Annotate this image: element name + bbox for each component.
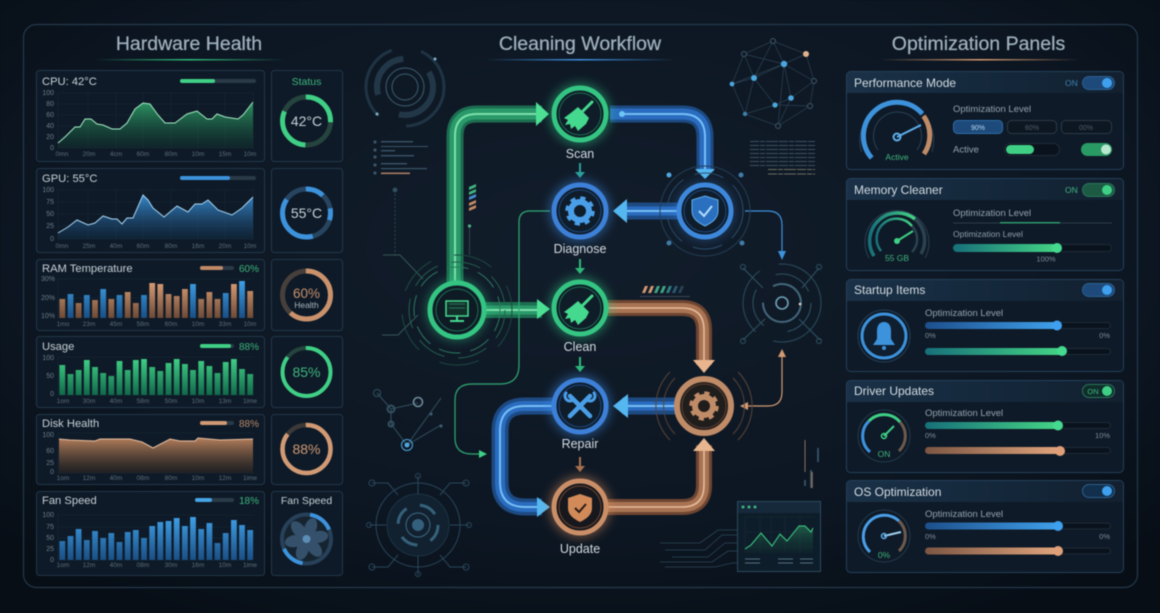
- slider: [925, 521, 1110, 531]
- chart card: usage: 0: [50, 391, 54, 398]
- panel: driver updates: Optimization Level: [925, 408, 1003, 419]
- pipe: repair to update: [500, 406, 556, 517]
- gauge: 0%: 0%: [878, 550, 891, 560]
- panel: performance mode: ON: [1065, 78, 1078, 88]
- decor: text lines: [750, 142, 815, 174]
- chart card: RAM temperature: 60%: [239, 264, 259, 275]
- decor: bottom left network: [374, 390, 442, 450]
- panel: startup items: Optimization Level: [925, 308, 1003, 319]
- ring card: disk: 88%: [292, 441, 321, 457]
- chart card: fan speed: 08m: [137, 562, 149, 569]
- chart card: usage: [36, 336, 264, 408]
- panel: driver updates: 10%: [1095, 431, 1110, 440]
- chart card: usage: 100: [42, 355, 54, 362]
- gauge: 55 GB: 55 GB: [885, 253, 909, 263]
- icon: shield: [568, 494, 592, 522]
- node: update: [549, 476, 611, 556]
- chart card: fan speed: 100: [42, 512, 54, 519]
- decor: orange stripes: [640, 286, 690, 297]
- panel: performance mode: Optimization Level: [953, 104, 1031, 115]
- icon: wrench and screwdriver: [565, 393, 595, 416]
- buttons: 60%: [1025, 125, 1039, 132]
- chart card: CPU: 20m: [83, 151, 95, 158]
- panel: memory cleaner: ON: [1065, 185, 1078, 195]
- chart card: disk health: 25: [46, 460, 54, 467]
- chart card: CPU: 0mn: [56, 151, 69, 158]
- chart card: usage: 58m: [137, 398, 149, 405]
- arrow: clean to repair: [575, 357, 585, 372]
- panel: hardware health: [36, 33, 342, 576]
- ring card: usage: 85%: [292, 364, 321, 380]
- panel: performance mode: Active: [953, 144, 979, 156]
- icon: gear: [568, 198, 592, 224]
- panel: performance mode: [846, 72, 1124, 170]
- panel: os optimization: OS Optimization: [854, 485, 941, 499]
- slider: [925, 346, 1110, 356]
- panel: memory cleaner: Optimization Level: [953, 208, 1031, 219]
- buttons: [954, 120, 1112, 134]
- decor: tick marks: [805, 440, 818, 488]
- icon: broom: [564, 296, 592, 325]
- chart card: RAM temperature: 33m: [219, 321, 231, 328]
- panel: performance mode: Performance Mode: [854, 76, 956, 90]
- decor: connector with dots: [382, 188, 423, 335]
- label: repair: Repair: [562, 437, 598, 451]
- panel: os optimization: Optimization Level: [925, 509, 1003, 520]
- chart card: RAM temperature: RAM Temperature: [42, 263, 133, 275]
- ring card: GPU: 55°C: [291, 205, 322, 221]
- chart card: disk health: 1ime: [243, 475, 257, 482]
- chart card: usage: 88%: [239, 342, 259, 353]
- label: diagnose: Diagnose: [554, 242, 606, 256]
- active bar: [1004, 144, 1060, 156]
- ring card: RAM health: [272, 260, 342, 330]
- label: scan: Scan: [566, 147, 594, 161]
- panel: startup items: [846, 280, 1124, 372]
- panel: memory cleaner: [846, 178, 1124, 270]
- chart card: CPU: 20: [46, 134, 54, 141]
- ring card: CPU status: 42°C: [291, 113, 322, 129]
- decor: circuit disc: [366, 474, 472, 576]
- toggle: [1082, 484, 1114, 498]
- buttons: 00%: [1079, 125, 1093, 132]
- chart card: RAM temperature: 30%: [41, 276, 55, 283]
- node: monitor: [402, 255, 512, 365]
- connector: shield to radar: [745, 211, 786, 260]
- node: orange gear: [656, 372, 752, 440]
- chart card: disk health: 12m: [219, 475, 231, 482]
- chart card: fan speed: 10m: [219, 562, 231, 569]
- decor: mini chart window: [660, 502, 820, 572]
- chart card: GPU: 80m: [165, 243, 177, 250]
- slider: [953, 243, 1112, 253]
- heading: optimization panels: Optimization Panels: [892, 33, 1065, 55]
- chart card: GPU: 75: [46, 199, 54, 206]
- chart card: RAM temperature: 10m: [244, 321, 256, 328]
- connector: gear to radar: [740, 349, 786, 410]
- chart card: fan speed: [36, 492, 264, 576]
- chart card: GPU: GPU: 55°C: [42, 173, 97, 185]
- chart card: fan speed: Fan Speed: [42, 495, 97, 507]
- arrow: diagnose to clean: [575, 259, 585, 274]
- ring card: CPU status: Status: [292, 76, 321, 88]
- chart card: fan speed: 30m: [165, 562, 177, 569]
- chart card: RAM temperature: 10m: [192, 321, 204, 328]
- chart card: CPU: 60m: [137, 151, 149, 158]
- chart card: disk health: 40m: [110, 475, 122, 482]
- gauge: active: Active: [885, 152, 909, 162]
- chart card: usage: 40m: [110, 398, 122, 405]
- pipe: clean to gear: [606, 308, 715, 373]
- chart card: fan speed: 50: [46, 535, 54, 542]
- toggle: [1082, 76, 1114, 90]
- chart card: CPU: 15m: [219, 151, 231, 158]
- panel: driver updates: Driver Updates: [854, 384, 934, 398]
- ring card: GPU: [272, 168, 342, 252]
- chart card: fan speed: 75: [46, 524, 54, 531]
- pipe: monitor to clean: [485, 299, 550, 319]
- panel: driver updates: [846, 380, 1124, 472]
- chart card: GPU: 16m: [192, 243, 204, 250]
- pipe: scan to shield: [610, 111, 715, 179]
- chart card: fan speed: 16m: [192, 562, 204, 569]
- chart card: fan speed: 1om: [57, 562, 69, 569]
- chart card: RAM temperature: 58m: [137, 321, 149, 328]
- slider: [925, 546, 1110, 556]
- chart card: usage: 50: [46, 373, 54, 380]
- chart card: CPU: 4cm: [110, 151, 122, 158]
- chart card: CPU: 40: [46, 123, 54, 130]
- gauge: 0%: [858, 510, 910, 562]
- chart card: RAM temperature: 45m: [110, 321, 122, 328]
- arrow: gear to repair: [613, 394, 675, 418]
- gauge: 55 GB: [865, 211, 929, 263]
- chart card: GPU: 40m: [110, 243, 122, 250]
- chart card: RAM temperature: 1mo: [57, 321, 70, 328]
- chart card: fan speed: 18%: [239, 496, 259, 507]
- chart card: disk health: 0: [50, 469, 54, 476]
- chart card: CPU: 10m: [244, 151, 256, 158]
- chart card: usage: 1ime: [243, 398, 257, 405]
- ring card: CPU status: [272, 70, 342, 162]
- node: clean: [549, 277, 611, 354]
- chart card: fan speed: 25: [46, 546, 54, 553]
- panel: startup items: 0%: [1099, 331, 1110, 340]
- buttons: 90%: [971, 125, 985, 132]
- chart card: disk health: 60: [46, 448, 54, 455]
- slider: [925, 420, 1110, 430]
- chart card: RAM temperature: [36, 260, 264, 330]
- toggle: [1082, 284, 1114, 296]
- decor: status list: [373, 140, 428, 175]
- chart card: disk health: 1om: [57, 475, 69, 482]
- chart card: fan speed: 12m: [83, 562, 95, 569]
- icon: broom: [564, 102, 592, 131]
- icon: bell: [858, 310, 910, 362]
- decorative tech elements: [366, 38, 822, 576]
- pipe: update to gear: [606, 438, 715, 507]
- chart card: disk health: 08m: [137, 475, 149, 482]
- slider: [925, 320, 1110, 330]
- fan card: [272, 492, 342, 576]
- green toggle: [1081, 143, 1112, 156]
- heading: hardware health: Hardware Health: [116, 33, 262, 55]
- chart card: usage: 30m: [83, 398, 95, 405]
- chart card: CPU: 10m: [192, 151, 204, 158]
- chart card: GPU: 25m: [83, 243, 95, 250]
- ring card: RAM health: 60%: [293, 286, 320, 301]
- ring card: RAM health: Health: [294, 300, 319, 310]
- arrow: repair to update: [575, 457, 585, 472]
- chart card: CPU: CPU: 42°C: [42, 76, 97, 88]
- chart card: GPU: 25: [46, 223, 54, 230]
- chart card: usage: Usage: [42, 341, 74, 353]
- node: repair: [549, 375, 611, 451]
- chart card: GPU: [36, 168, 264, 252]
- chart card: disk health: [36, 414, 264, 484]
- gauge: on: [858, 410, 910, 462]
- ring card: usage: [272, 336, 342, 408]
- chart card: disk health: 12m: [83, 475, 95, 482]
- chart card: RAM temperature: 10%: [41, 313, 55, 320]
- panel: startup items: 0%: [925, 331, 936, 340]
- chart card: disk health: 88%: [239, 419, 259, 430]
- connector: diagnose to repair branch: [455, 211, 550, 458]
- chart card: disk health: 10m: [192, 475, 204, 482]
- panel: os optimization: 0%: [1099, 532, 1110, 541]
- chart card: RAM temperature: 20%: [41, 295, 55, 302]
- chart card: fan speed: 40m: [110, 562, 122, 569]
- decor: target circle: [366, 48, 444, 126]
- chart card: RAM temperature: 60m: [165, 321, 177, 328]
- chart card: disk health: 100: [42, 432, 54, 439]
- toggle: ON: [1087, 387, 1099, 396]
- chart card: CPU: 100: [42, 90, 54, 97]
- decor: network top right: [730, 38, 816, 128]
- gauge: on: ON: [878, 449, 890, 459]
- chart card: CPU: 80m: [165, 151, 177, 158]
- panel: memory cleaner: 100%: [1036, 254, 1056, 264]
- node: diagnose: [549, 180, 611, 256]
- fan card: Fan Speed: [281, 495, 332, 507]
- panel: memory cleaner: Optimization Level: [953, 229, 1023, 239]
- chart card: disk health: Disk Health: [42, 418, 99, 430]
- node: shield: [660, 166, 750, 256]
- panel: os optimization: [846, 480, 1124, 572]
- chart card: fan speed: 1ime: [243, 562, 257, 569]
- label: clean: Clean: [564, 340, 596, 354]
- node: scan: [549, 83, 611, 161]
- panel: driver updates: 0%: [925, 431, 936, 440]
- gauge: active: [860, 102, 934, 162]
- chart card: disk health: 80m: [165, 475, 177, 482]
- chart card: GPU: 50: [46, 211, 54, 218]
- chart card: GPU: 0: [50, 236, 54, 243]
- chart card: CPU: [36, 70, 264, 162]
- decor: stripes: [468, 184, 476, 255]
- chart card: GPU: 60m: [137, 243, 149, 250]
- toggle: [1082, 384, 1114, 398]
- label: update: Update: [560, 542, 600, 556]
- panel: memory cleaner: Memory Cleaner: [854, 183, 943, 197]
- panel: os optimization: 0%: [925, 532, 936, 541]
- chart card: usage: 50m: [165, 398, 177, 405]
- panel: startup items: Startup Items: [854, 283, 925, 297]
- decor: radar: [740, 264, 822, 344]
- heading: cleaning workflow: Cleaning Workflow: [499, 33, 662, 55]
- arrow: scan to diagnose: [575, 163, 585, 178]
- pipe: monitor to scan: [455, 102, 549, 290]
- slider: [925, 446, 1110, 456]
- chart card: fan speed: 0: [50, 557, 54, 564]
- chart card: CPU: 0: [50, 145, 54, 152]
- chart card: GPU: 0mn: [56, 243, 69, 250]
- toggle: [1082, 184, 1114, 196]
- chart card: GPU: 100: [42, 187, 54, 194]
- chart card: CPU: 60: [46, 112, 54, 119]
- chart card: usage: 1om: [57, 398, 69, 405]
- chart card: GPU: 10m: [244, 243, 256, 250]
- chart card: CPU: 80: [46, 101, 54, 108]
- chart card: GPU: 20m: [219, 243, 231, 250]
- chart card: RAM temperature: 23m: [83, 321, 95, 328]
- ring card: disk: [272, 414, 342, 484]
- chart card: usage: 13m: [219, 398, 231, 405]
- arrow: shield to diagnose: [613, 199, 678, 223]
- chart card: usage: 10m: [192, 398, 204, 405]
